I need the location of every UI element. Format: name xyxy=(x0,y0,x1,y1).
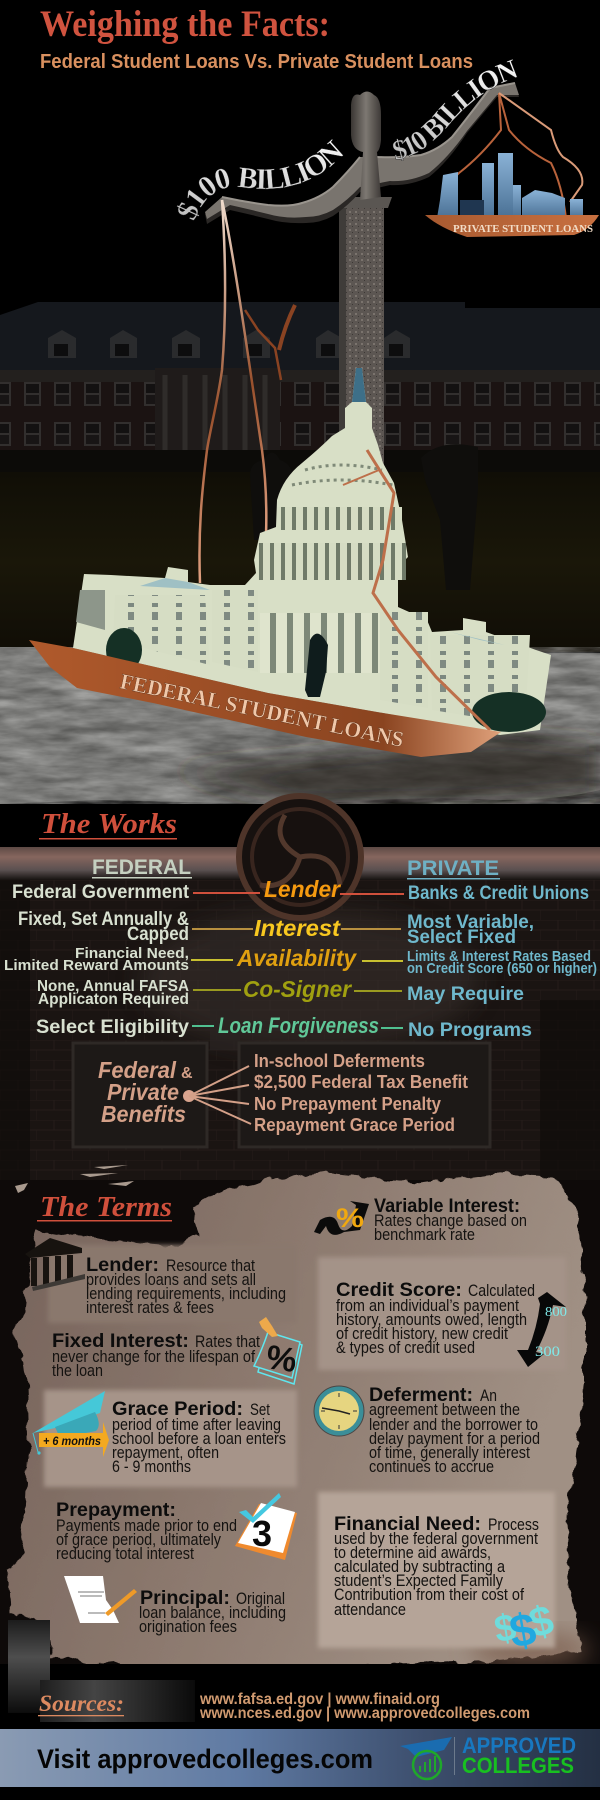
icon: pinned percent note xyxy=(254,1317,302,1384)
row: availability: Financial Need, xyxy=(75,945,189,962)
panel: federal and private benefits: Federal xyxy=(98,1057,177,1083)
term: principal: Principal: xyxy=(140,1587,230,1609)
icon: clock xyxy=(314,1386,364,1436)
heading: the works: The Works xyxy=(41,809,177,840)
term: credit score: of credit history, new credit xyxy=(336,1325,508,1343)
panel: federal and private benefits: Private xyxy=(107,1079,179,1105)
row: loan forgiveness: Loan Forgiveness xyxy=(218,1013,379,1038)
row: lender: Federal Government xyxy=(12,881,189,903)
term: prepayment: Payments made prior to end xyxy=(56,1517,237,1535)
term: credit score: & types of credit used xyxy=(336,1339,475,1357)
term: financial need: student’s Expected Family xyxy=(334,1572,504,1590)
panel: list of benefits xyxy=(183,1043,490,1147)
title: Weighing the Facts: xyxy=(40,4,330,45)
term: prepayment: reducing total interest xyxy=(56,1545,194,1563)
term: variable interest: benchmark rate xyxy=(374,1226,475,1244)
source links xyxy=(199,1691,530,1722)
trees beside the capitol xyxy=(106,628,546,732)
row: interest xyxy=(18,908,534,948)
row: loan forgiveness xyxy=(36,1013,532,1041)
term: lender: Lender: xyxy=(86,1254,159,1276)
scale: column xyxy=(339,197,392,475)
scale: finial xyxy=(351,92,381,200)
ground texture xyxy=(0,647,600,805)
term: grace period xyxy=(112,1398,286,1476)
icon: variable interest squiggle xyxy=(314,1201,369,1235)
icon: variable interest squiggle: % xyxy=(336,1203,364,1233)
panel: federal and private benefits: & xyxy=(181,1065,193,1082)
term: principal: loan balance, including xyxy=(139,1604,286,1622)
term: deferment: agreement between the xyxy=(369,1401,520,1419)
panel: federal and private benefits: Benefits xyxy=(101,1101,186,1127)
term: variable interest: Variable Interest: xyxy=(374,1195,520,1217)
column header: private: PRIVATE xyxy=(407,857,499,880)
private student loans pan: PRIVATE STUDENT LOANS xyxy=(453,223,593,235)
background: silhouettes of two people xyxy=(250,444,478,590)
term: fixed interest: the loan xyxy=(52,1362,103,1380)
panel: federal and private benefits xyxy=(73,1043,207,1147)
label: $10 billion: $10 BILLION xyxy=(392,59,518,161)
icon: pinned percent note: % xyxy=(264,1338,299,1380)
row: co-signer: May Require xyxy=(407,983,524,1005)
row: loan forgiveness: Select Eligibility xyxy=(36,1016,189,1038)
icon: dollar signs: $ xyxy=(491,1606,519,1652)
term: financial need: used by the federal government xyxy=(334,1530,538,1548)
term: grace period: repayment, often xyxy=(112,1444,219,1462)
term: principal xyxy=(139,1587,286,1636)
term: deferment xyxy=(369,1384,540,1476)
column header: federal: FEDERAL xyxy=(92,856,191,879)
term: grace period: period of time after leaving xyxy=(112,1416,281,1434)
term: grace period: Set xyxy=(250,1401,270,1419)
term: credit score: from an individual’s payment xyxy=(336,1297,519,1315)
icon: calendar with check mark xyxy=(235,1493,297,1560)
term: fixed interest xyxy=(52,1330,260,1380)
scale: beam xyxy=(205,83,519,224)
term: deferment: An xyxy=(480,1387,497,1405)
lighter block: lender xyxy=(48,1245,297,1323)
row: availability: Limited Reward Amounts xyxy=(4,957,189,974)
row: lender: Lender xyxy=(264,876,341,902)
term: deferment: continues to accrue xyxy=(369,1458,494,1476)
term: credit score: Calculated xyxy=(468,1282,535,1300)
term: financial need: Financial Need: xyxy=(334,1513,481,1535)
row: co-signer: Applicaton Required xyxy=(38,991,189,1008)
medallion xyxy=(239,796,361,918)
icon: dollar signs: $ xyxy=(524,1596,558,1647)
row: interest: Capped xyxy=(127,923,189,945)
icon: credit score range arrow: 300 xyxy=(535,1344,560,1360)
icon: graduation cap with six months arrow: + 6 months xyxy=(43,1434,101,1448)
term: credit score: history, amounts owed, length xyxy=(336,1311,527,1329)
subtitle: Federal Student Loans Vs. Private Student Loans xyxy=(40,51,473,73)
rope over capitol xyxy=(343,450,490,730)
background: lawn xyxy=(0,472,600,652)
heading: the terms: The Terms xyxy=(40,1192,172,1223)
panel: list of benefits: No Prepayment Penalty xyxy=(254,1094,441,1114)
term: deferment: delay payment for a period xyxy=(369,1430,540,1448)
term: grace period: Grace Period: xyxy=(112,1398,243,1420)
logo: approved colleges xyxy=(400,1733,576,1779)
term: financial need: attendance xyxy=(334,1601,406,1619)
icon: calendar with check mark: 3 xyxy=(252,1513,272,1554)
row: interest: Interest xyxy=(254,915,341,941)
icon: credit score range arrow: 800 xyxy=(545,1305,567,1320)
term: variable interest xyxy=(374,1195,527,1244)
panel: list of benefits: Repayment Grace Period xyxy=(254,1115,455,1135)
band: sources backdrop xyxy=(0,1620,600,1729)
ropes: left xyxy=(199,200,295,583)
term: prepayment: Prepayment: xyxy=(56,1499,176,1521)
term: financial need: Process xyxy=(488,1516,539,1534)
panel: parchment xyxy=(0,1165,600,1700)
ropes: right xyxy=(440,93,582,218)
term: principal: origination fees xyxy=(139,1618,237,1636)
panel: list of benefits: $2,500 Federal Tax Benefit xyxy=(254,1072,468,1092)
term: credit score: Credit Score: xyxy=(336,1279,462,1301)
term: financial need: calculated by subtracting a xyxy=(334,1558,506,1576)
row: availability: Availability xyxy=(236,945,357,971)
source links: www.fafsa.ed.gov | www.finaid.org xyxy=(199,1691,440,1708)
term: lender xyxy=(86,1254,286,1317)
term: lender: Resource that xyxy=(166,1257,255,1275)
panel: list of benefits: In-school Deferments xyxy=(254,1051,425,1071)
term: deferment: of time, generally interest xyxy=(369,1444,530,1462)
private student loans pan xyxy=(425,215,599,237)
term: grace period: 6 - 9 months xyxy=(112,1458,191,1476)
icon: bank temple xyxy=(25,1238,85,1291)
federal student loans pan xyxy=(29,640,501,757)
icon: dollar signs xyxy=(491,1596,558,1658)
term: deferment: Deferment: xyxy=(369,1384,473,1406)
term: lender: provides loans and sets all xyxy=(86,1271,256,1289)
term: fixed interest: Fixed Interest: xyxy=(52,1330,189,1352)
term: fixed interest: never change for the lifespan of xyxy=(52,1348,255,1366)
row: loan forgiveness: No Programs xyxy=(408,1019,532,1041)
term: credit score xyxy=(336,1279,535,1357)
private lender skyline xyxy=(437,153,583,218)
row: interest: Fixed, Set Annually & xyxy=(18,908,189,930)
term: financial need: Contribution from their cost of xyxy=(334,1586,524,1604)
source links: www.nces.ed.gov | www.approvedcolleges.com xyxy=(199,1705,530,1722)
term: lender: lending requirements, including xyxy=(86,1285,286,1303)
row: interest: Select Fixed xyxy=(407,926,516,948)
row: lender xyxy=(12,876,589,904)
icon: signed document with pencil xyxy=(64,1576,137,1623)
label: $100 billion: $100 BILLION xyxy=(176,139,344,220)
row: co-signer xyxy=(37,976,524,1008)
row: co-signer: None, Annual FAFSA xyxy=(37,978,189,995)
term: grace period: school before a loan enters xyxy=(112,1430,286,1448)
term: variable interest: Rates change based on xyxy=(374,1212,527,1230)
section backdrop: works xyxy=(0,804,600,1180)
sources heading: Sources: xyxy=(39,1691,124,1716)
term: prepayment: of grace period, ultimately xyxy=(56,1531,222,1549)
term: lender: interest rates & fees xyxy=(86,1299,214,1317)
row: interest: Most Variable, xyxy=(407,911,534,933)
icon: graduation cap with six months arrow xyxy=(33,1391,109,1457)
row: co-signer: Co-Signer xyxy=(243,976,352,1002)
federal student loans pan: FEDERAL STUDENT LOANS xyxy=(118,668,406,752)
capitol building xyxy=(73,368,551,735)
term: fixed interest: Rates that xyxy=(195,1333,260,1351)
background: campus building xyxy=(0,302,600,472)
icon: credit score range arrow xyxy=(517,1292,567,1367)
row: availability xyxy=(4,945,597,977)
icon: dollar signs: $ xyxy=(506,1602,540,1658)
footer banner: Visit approvedcolleges.com xyxy=(37,1744,373,1774)
term: prepayment xyxy=(56,1499,237,1563)
term: principal: Original xyxy=(236,1590,285,1608)
logo: approved colleges: APPROVED xyxy=(462,1733,576,1758)
term: financial need: to determine aid awards, xyxy=(334,1544,491,1562)
footer banner xyxy=(0,1729,600,1787)
term: financial need xyxy=(334,1513,539,1619)
term: deferment: lender and the borrower to xyxy=(369,1416,538,1434)
logo: approved colleges: COLLEGES xyxy=(462,1753,574,1778)
